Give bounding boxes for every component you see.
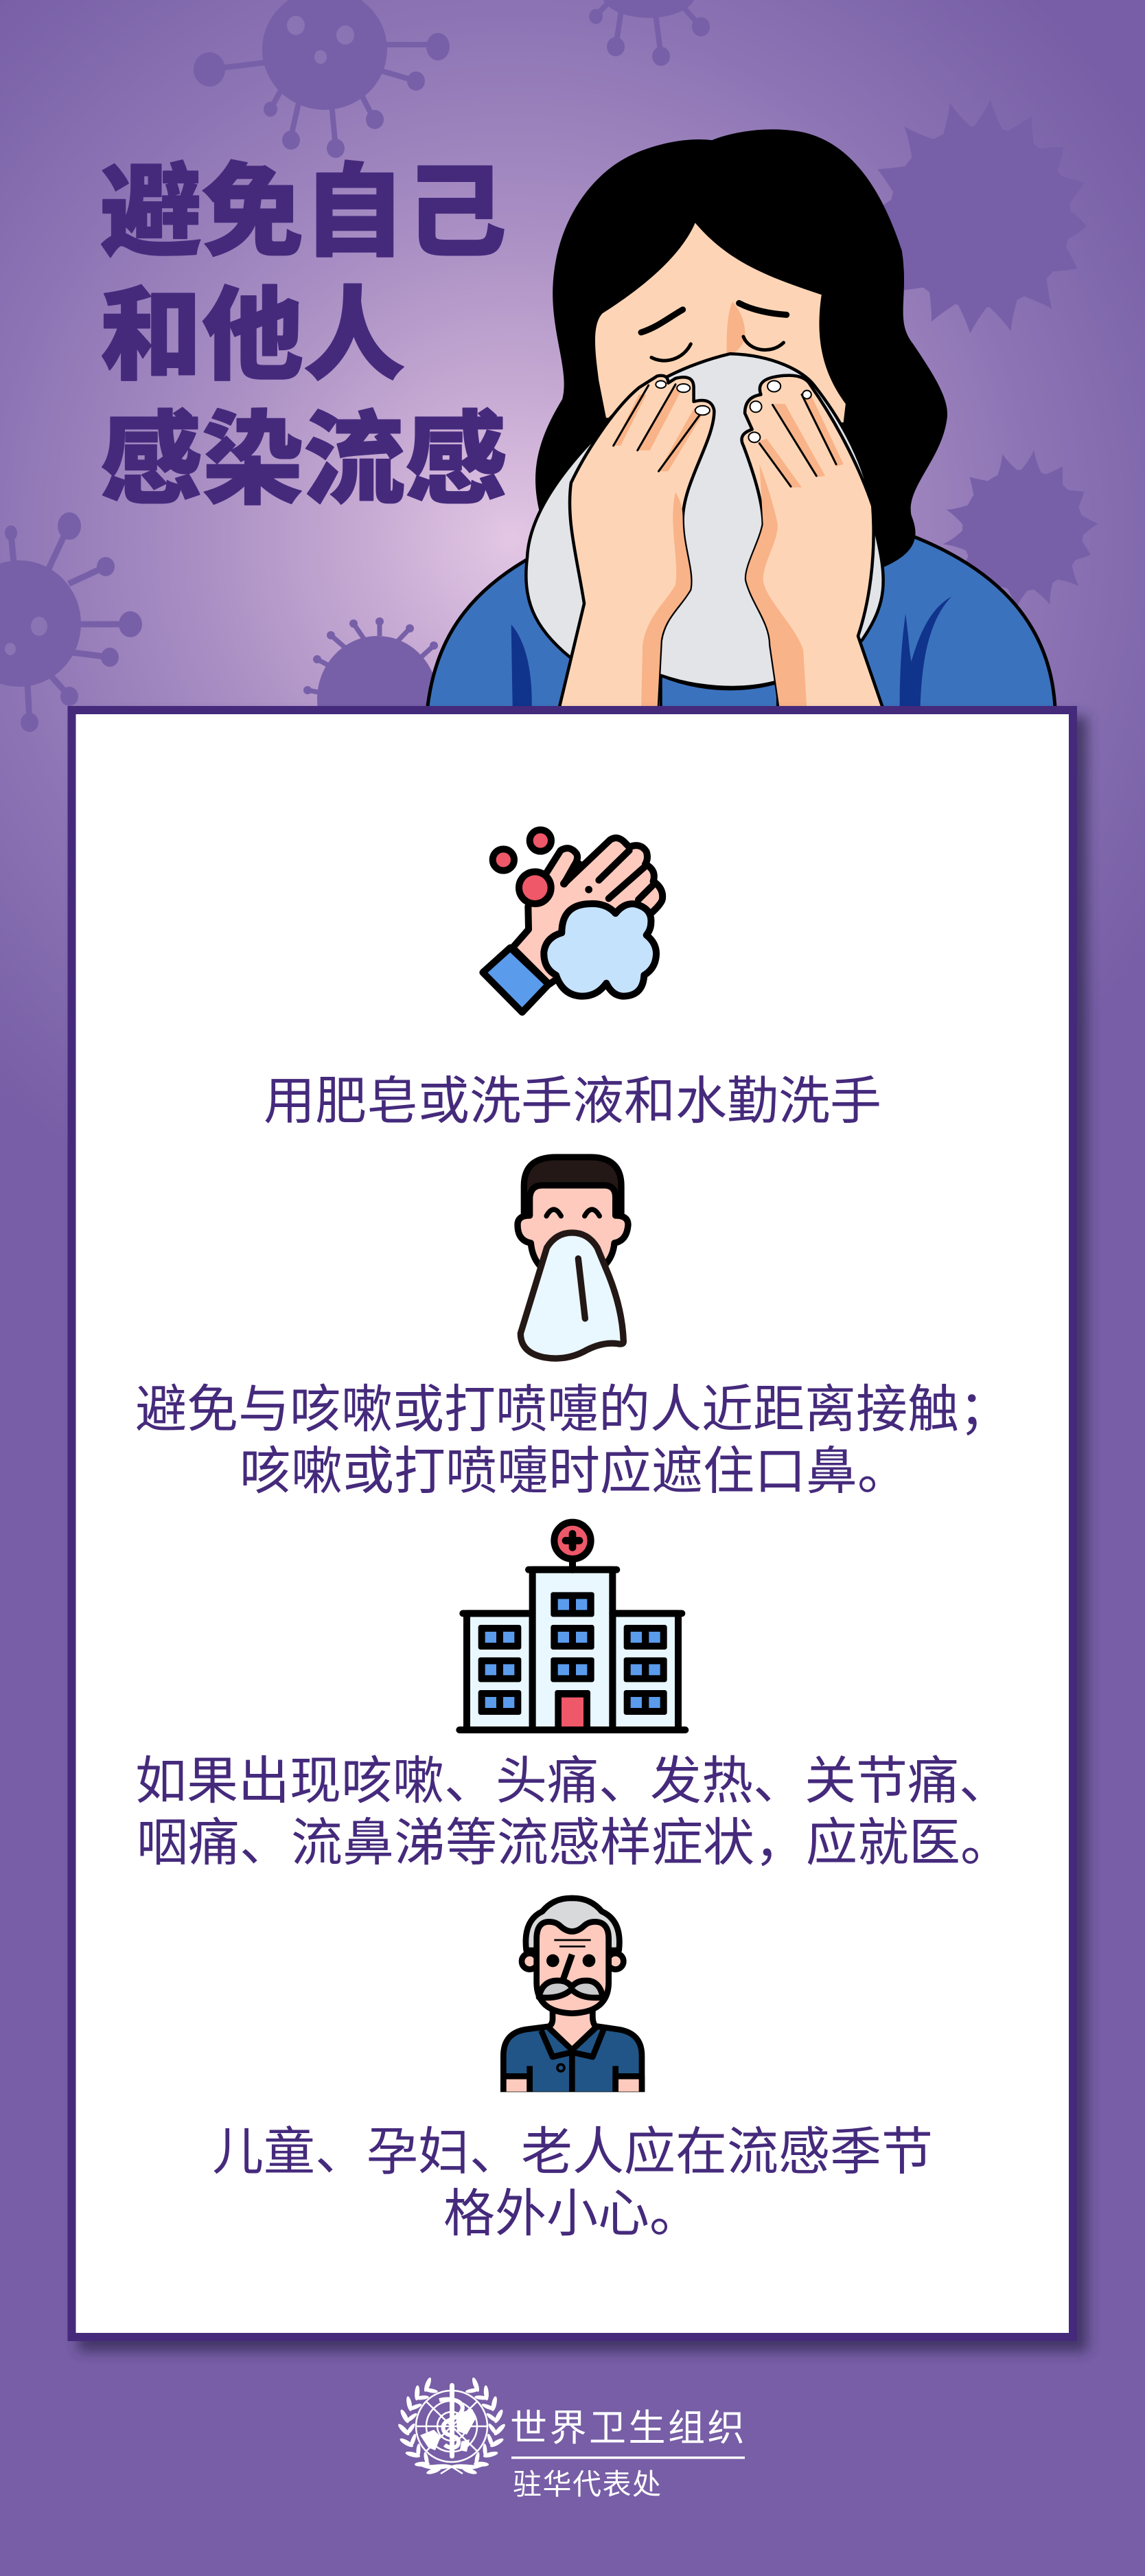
icon: hospital (459, 1523, 685, 1730)
left hand shadows (614, 385, 705, 710)
nose shadow (726, 301, 745, 355)
text: children, pregnant women and the elderly: 格外小心。 (443, 2185, 701, 2242)
title (100, 156, 507, 517)
white content panel (71, 710, 1073, 2337)
text: seek medical care (135, 1752, 1012, 1871)
text: seek medical care: 咽痛、流鼻涕等流感样症状，应就医。 (137, 1814, 1012, 1871)
text: seek medical care: 如果出现咳嗽、头痛、发热、关节痛、 (135, 1752, 1010, 1810)
right hand shadows (746, 397, 844, 710)
panel shadow (78, 716, 1087, 2351)
decorative virus: bottom centre (303, 617, 438, 762)
finger nails (656, 380, 811, 442)
decorative virus: spiked right (941, 448, 1099, 610)
decorative virus: large spiked upper right (870, 98, 1090, 336)
logo rule (511, 2457, 745, 2459)
finger lines (614, 385, 836, 486)
decorative virus: top left (194, 0, 450, 158)
eyebrows (641, 303, 787, 332)
text: avoid close contact: 咳嗽或打喷嚏时应遮住口鼻。 (240, 1442, 909, 1500)
title: 避免自己 (100, 156, 507, 269)
hair (535, 129, 947, 569)
icon: elderly man (498, 1898, 647, 2099)
icon: hands washing with soap (483, 830, 662, 1012)
title: 和他人 (100, 280, 405, 393)
text: children, pregnant women and the elderly: 儿童、孕妇、老人应在流感季节 (212, 2123, 933, 2180)
illustration: woman sneezing into tissue (427, 129, 1055, 710)
shirt folds (511, 597, 951, 710)
text: children, pregnant women and the elderly (212, 2123, 933, 2242)
decorative virus: lower left (0, 512, 142, 732)
text: avoid close contact (135, 1380, 1010, 1500)
right hand (742, 376, 883, 710)
blue shirt (427, 536, 1055, 710)
logo: WHO emblem (397, 2377, 507, 2476)
logo text: organisation name: 世界卫生组织 (510, 2408, 747, 2449)
face (595, 223, 846, 422)
text: avoid close contact: 避免与咳嗽或打喷嚏的人近距离接触； (135, 1380, 1010, 1438)
icon: person with tissue (518, 1157, 628, 1358)
tissue (526, 354, 883, 687)
left hand (559, 376, 714, 710)
logo text: China office: 驻华代表处 (513, 2468, 662, 2500)
closed eyes (651, 337, 783, 361)
blue neckline under tissue (661, 676, 778, 710)
text: wash hands: 用肥皂或洗手液和水勤洗手 (264, 1072, 881, 1130)
title: 感染流感 (100, 404, 507, 517)
decorative virus: top centre (589, 0, 710, 66)
